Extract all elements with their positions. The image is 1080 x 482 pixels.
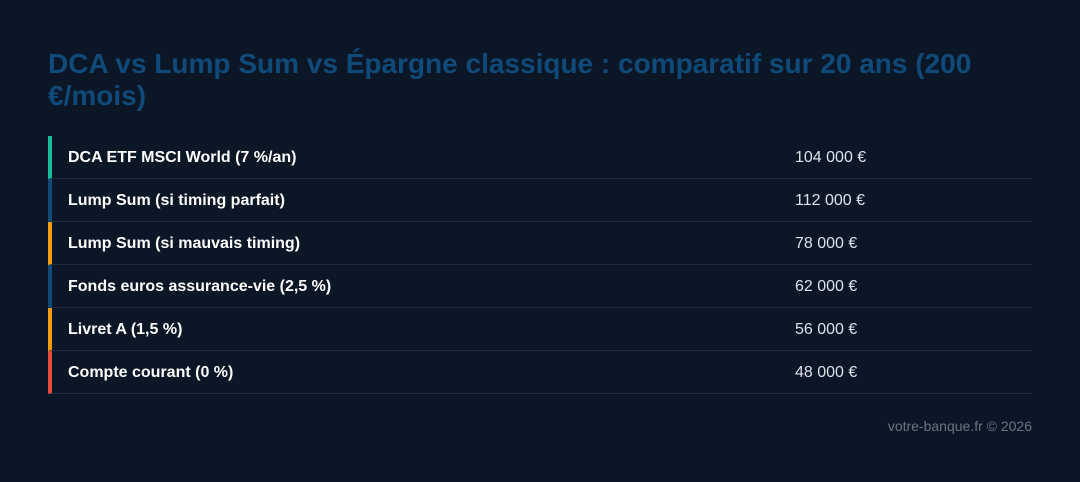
table <box>48 136 1032 394</box>
row: fonds euros: 62 000 € <box>795 278 857 295</box>
row: fonds euros <box>48 265 1032 308</box>
row: lump sum bad: 78 000 € <box>795 235 857 252</box>
footer: votre-banque.fr © 2026 <box>888 418 1032 434</box>
row: compte courant: 48 000 € <box>795 364 857 381</box>
row: lump sum bad: Lump Sum (si mauvais timing) <box>68 235 300 252</box>
row: lump sum perfect: 112 000 € <box>795 192 865 209</box>
row: fonds euros: Fonds euros assurance-vie (2,5 %) <box>68 278 331 295</box>
row: compte courant <box>48 351 1032 394</box>
row: DCA: DCA ETF MSCI World (7 %/an) <box>68 149 296 166</box>
row: lump sum perfect: Lump Sum (si timing parfait) <box>68 192 285 209</box>
row: compte courant: Compte courant (0 %) <box>68 364 233 381</box>
row: DCA: 104 000 € <box>795 149 866 166</box>
row: DCA <box>48 136 1032 179</box>
row: livret A <box>48 308 1032 351</box>
row: lump sum bad <box>48 222 1032 265</box>
row: lump sum perfect <box>48 179 1032 222</box>
title: DCA vs Lump Sum vs Épargne classique : comparatif sur 20 ans (200 €/mois) <box>48 48 971 111</box>
row: livret A: Livret A (1,5 %) <box>68 321 182 338</box>
row: livret A: 56 000 € <box>795 321 857 338</box>
